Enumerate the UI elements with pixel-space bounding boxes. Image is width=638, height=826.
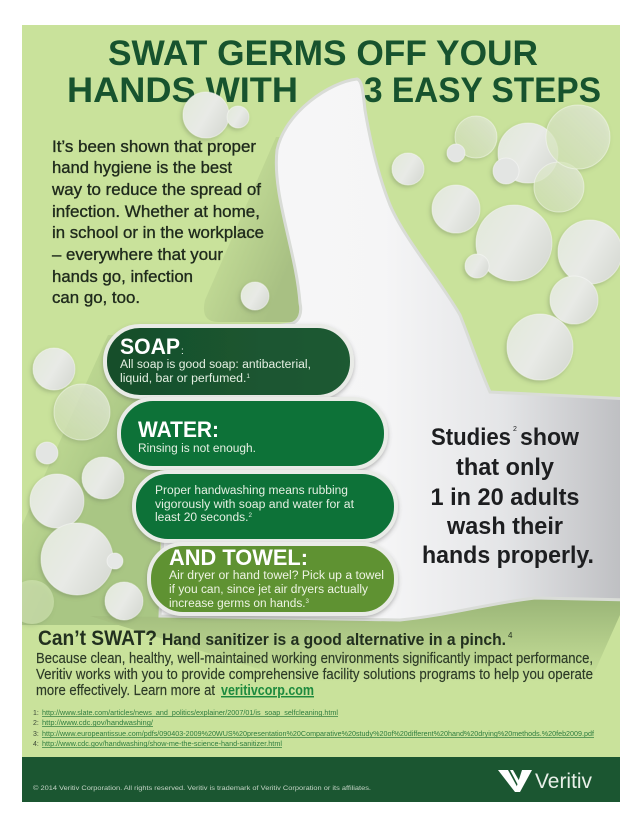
pill: and towel: if you can, since jet air dryers actually <box>169 584 368 596</box>
statistic callout: hands properly. <box>422 542 594 569</box>
pill: proper handwashing: least 20 seconds. <box>155 512 245 524</box>
title: HANDS WITH <box>67 71 298 110</box>
pill: water: Rinsing is not enough. <box>138 443 256 455</box>
closing paragraph: Because clean, healthy, well-maintained working environments significantly impact performance, <box>36 651 593 667</box>
pill: and towel: increase germs on hands. <box>169 598 301 610</box>
pill: proper handwashing: Proper handwashing means rubbing <box>155 485 348 497</box>
footer bar <box>22 757 620 802</box>
pill: soap <box>105 326 352 397</box>
pill: water <box>119 399 386 468</box>
can't swat heading <box>38 627 513 650</box>
can't swat heading: Hand sanitizer is a good alternative in a pinch. <box>162 630 506 649</box>
copyright: © 2014 Veritiv Corporation. All rights reserved. Veritiv is trademark of Veritiv Corporation or its affiliates. <box>33 784 371 792</box>
can't swat heading: Can’t SWAT? <box>38 627 157 650</box>
closing paragraph: Veritiv works with you to provide comprehensive facility solutions programs to help you operate <box>36 667 593 683</box>
reference links: 1: <box>33 710 39 717</box>
title: SWAT GERMS OFF YOUR <box>108 34 538 73</box>
thumb shadow on the left <box>204 137 305 322</box>
veritiv logo <box>498 770 592 793</box>
shadow below the hand <box>119 600 620 668</box>
can't swat heading: 4 <box>508 631 513 640</box>
statistic callout: that only <box>456 454 555 481</box>
statistic callout: Studies <box>431 424 511 451</box>
title <box>67 34 601 110</box>
pill: and towel <box>149 544 396 614</box>
pill: and towel: AND TOWEL: <box>169 545 308 570</box>
reference links: http://www.cdc.gov/handwashing/show-me-the-science-hand-sanitizer.html <box>42 741 282 748</box>
intro text: It’s been shown that proper <box>52 137 256 156</box>
reference links: http://www.slate.com/articles/news_and_politics/explainer/2007/01/is_soap_selfcleaning.html <box>42 710 338 717</box>
intro text <box>51 137 264 307</box>
pill: soap: liquid, bar or perfumed. <box>120 373 238 385</box>
statistic callout: 2 <box>513 426 517 433</box>
intro text: way to reduce the spread of <box>51 180 261 199</box>
intro text: hand hygiene is the best <box>52 158 232 177</box>
pill: proper handwashing: 2 <box>249 513 253 519</box>
reference links: http://www.cdc.gov/handwashing/ <box>42 720 153 727</box>
intro text: – everywhere that your <box>52 245 223 264</box>
pill: soap: 1 <box>246 374 251 380</box>
pill: proper handwashing <box>134 472 396 541</box>
closing paragraph <box>36 651 593 699</box>
pill: and towel: Air dryer or hand towel? Pick up a towel <box>169 570 384 582</box>
veritiv logo: Veritiv <box>535 770 592 793</box>
pill shadow on the left <box>22 335 160 625</box>
reference links <box>33 710 594 748</box>
reference links: 3: <box>33 731 39 738</box>
soap bubbles, lower left <box>10 348 143 624</box>
pill: soap: : <box>181 346 184 357</box>
reference links: 4: <box>33 741 39 748</box>
soap bubbles, upper <box>183 92 622 380</box>
pill: soap: SOAP <box>120 334 180 359</box>
intro text: in school or in the workplace <box>52 223 264 242</box>
statistic callout: 1 in 20 adults <box>430 484 580 511</box>
intro text: can go, too. <box>52 288 140 307</box>
intro text: hands go, infection <box>52 267 193 286</box>
closing paragraph: more effectively. Learn more at <box>36 683 215 699</box>
reference links: 2: <box>33 720 39 727</box>
statistic callout: wash their <box>446 513 563 540</box>
thumb hand shape <box>160 79 630 620</box>
pill: soap: All soap is good soap: antibacterial, <box>120 359 311 371</box>
closing paragraph: veritivcorp.com <box>221 683 314 699</box>
pill: proper handwashing: vigorously with soap and water for at <box>155 499 355 511</box>
intro text: infection. Whether at home, <box>52 202 260 221</box>
pill: and towel: 3 <box>306 599 310 605</box>
statistic callout: show <box>520 424 579 451</box>
pill: water: WATER: <box>138 417 219 442</box>
reference links: http://www.europeantissue.com/pdfs/090403-2009%20WUS%20presentation%20Comparative%20study%20of%20different%20hand%20drying%20methods.%20feb2009.pdf <box>42 731 594 738</box>
title: 3 EASY STEPS <box>364 71 601 110</box>
statistic callout <box>422 424 594 569</box>
